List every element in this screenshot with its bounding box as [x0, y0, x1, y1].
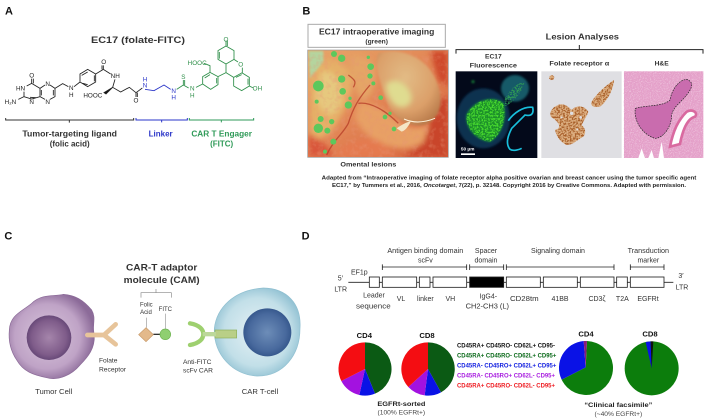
- construct labels: Spacer: [475, 248, 498, 255]
- atom labels: folic acid: O: [101, 59, 106, 66]
- structure: linker: H: [143, 76, 148, 83]
- legend: phenotypes: CD45RA+ CD45RO- CD62L+ CD95-: [457, 344, 555, 350]
- label: EC17 fluorescence: Fluorescence: [470, 62, 517, 69]
- photo: omental lesions: [308, 50, 448, 157]
- caption: omental lesions: Omental lesions: [340, 162, 397, 169]
- box: intraoperative imaging heading: (green): [365, 39, 388, 46]
- micrograph: H&E: [624, 71, 703, 158]
- label: CAR T-cell: CAR T-cell: [242, 387, 279, 396]
- panel: D construct and phenotype: [302, 231, 688, 418]
- construct labels: 3′: [678, 273, 684, 280]
- icon: tumor cell: [9, 294, 94, 379]
- construct labels: Antigen binding domain: [387, 248, 463, 255]
- legend: phenotypes: CD45RA+ CD45RO- CD62L- CD95+: [457, 383, 555, 389]
- caption: source attribution: EC17,” by Tummers et al., 2016, Oncotarget, 7(22), p. 32148. Copyright 2016 by Creative Commons. Adapted with permission.: [332, 183, 674, 189]
- panel: C CAR-T adaptor mechanism: [4, 231, 300, 396]
- pie chart: CD4 EGFRt-sorted: CD4: [357, 331, 373, 340]
- caption: clinical facsimile: “Clinical facsimile”: [584, 402, 652, 409]
- structure: FITC: S: [181, 74, 185, 81]
- labels: folic acid and FITC: Acid: [140, 310, 152, 316]
- construct labels: CD3ζ: [588, 296, 606, 303]
- label: linker: Linker: [149, 129, 173, 138]
- gene construct diagram: [348, 264, 673, 287]
- atom labels: folic acid: H: [69, 92, 74, 99]
- construct labels: LTR: [676, 284, 688, 291]
- structure: linker: [143, 76, 176, 101]
- construct labels: EF1p: [351, 270, 368, 277]
- construct labels: T2A: [616, 296, 629, 303]
- legend: phenotypes: CD45RA- CD45RO+ CD62L- CD95+: [457, 374, 555, 380]
- atom labels: folic acid: N: [45, 81, 50, 88]
- structure: FITC: N: [190, 86, 195, 93]
- panel: A chemical structure: [5, 6, 263, 149]
- construct labels: domain: [475, 258, 498, 265]
- panel letter D: D: [302, 231, 310, 243]
- label: folate receptor: Folate: [99, 357, 118, 364]
- micrograph: EC17 fluorescence: 50 μm: [461, 147, 474, 152]
- construct labels: EGFRt: [637, 296, 659, 303]
- label: tumor cell: Tumor Cell: [35, 387, 73, 396]
- structure: FITC: [177, 36, 263, 100]
- caption: EGFRt-sorted: (100% EGFRt+): [378, 409, 425, 416]
- structure: linker: H: [171, 94, 176, 101]
- pie chart: CD8 clinical facsimile: CD8: [642, 330, 658, 339]
- box: intraoperative imaging heading: [308, 24, 445, 47]
- bracket: CAM components: [141, 289, 171, 298]
- construct labels: Signaling domain: [531, 248, 585, 255]
- atom labels: folic acid: HOOC: [83, 92, 103, 99]
- structure: FITC: O: [238, 61, 243, 68]
- panel letter C: C: [4, 231, 12, 243]
- construct labels: IgG4-: [480, 293, 498, 300]
- construct labels: 41BB: [551, 296, 569, 303]
- atom labels: folic acid: [5, 59, 139, 106]
- construct labels: CD28tm: [510, 296, 539, 303]
- pie chart: CD8 EGFRt-sorted: CD8: [419, 331, 435, 340]
- construct labels: CH2-CH3 (L): [466, 304, 509, 311]
- construct labels: VL: [397, 296, 405, 303]
- legend: phenotypes: CD45RA- CD45RO+ CD62L+ CD95+: [457, 364, 557, 370]
- structure: FITC: HOOC: [188, 60, 207, 67]
- atom labels: folic acid: HN: [16, 86, 26, 93]
- label: folate receptor alpha: Folate receptor α: [549, 61, 610, 68]
- icon: anti-FITC CAR: [190, 323, 237, 345]
- atom labels: folic acid: O: [29, 72, 34, 79]
- panel letter B: B: [302, 6, 310, 18]
- label: folate receptor: Receptor: [99, 367, 127, 374]
- bracket: lesion analyses: [456, 45, 703, 54]
- structure: folic acid part: [18, 65, 142, 99]
- label: CAR T engager: (FITC): [210, 140, 234, 149]
- construct labels: Transduction: [628, 248, 669, 255]
- labels: folic acid and FITC: FITC: [159, 307, 173, 313]
- micrograph: folate receptor: [541, 71, 622, 158]
- structure: FITC: H: [190, 93, 195, 100]
- label: anti-FITC scFv CAR: Anti-FITC: [183, 359, 212, 366]
- legend: phenotypes: [457, 344, 557, 389]
- construct labels: VH: [445, 296, 455, 303]
- pie chart: CD8 EGFRt-sorted: [401, 331, 455, 396]
- structure: linker: N: [171, 88, 176, 95]
- atom labels: folic acid: O: [134, 98, 139, 105]
- structure: linker: N: [143, 83, 148, 90]
- caption: source attribution: Adapted from “Intraoperative imaging of folate receptor alpha positive ovarian and breast cancer using the tumor specific agent: [322, 175, 696, 181]
- heading: lesion analyses: Lesion Analyses: [546, 31, 619, 41]
- construct labels: sequence: [356, 304, 391, 311]
- atom labels: folic acid: H₂N: [5, 99, 17, 106]
- structure: FITC: OH: [253, 86, 263, 93]
- panel letter A: A: [5, 6, 13, 18]
- label: anti-FITC scFv CAR: scFv CAR: [183, 367, 213, 374]
- caption: clinical facsimile: (~40% EGFRt+): [594, 411, 642, 418]
- caption: EGFRt-sorted: EGFRt-sorted: [377, 401, 425, 408]
- heading: CAR-T adaptor molecule: molecule (CAM): [124, 275, 200, 285]
- bracket: CAR T engager: [189, 118, 254, 122]
- pie chart: CD4 EGFRt-sorted: [338, 331, 392, 396]
- bracket: linker: [136, 118, 187, 122]
- micrograph: EC17 fluorescence: [456, 71, 537, 158]
- heading: EC17: EC17 (folate-FITC): [91, 35, 185, 45]
- panel: B imaging: [302, 6, 703, 189]
- construct labels: Leader: [363, 292, 386, 299]
- pie chart: CD8 clinical facsimile: [625, 330, 679, 395]
- icon: adaptor molecule: [139, 314, 171, 342]
- atom labels: folic acid: NH: [111, 73, 120, 80]
- construct labels: LTR: [334, 286, 347, 293]
- atom labels: folic acid: N: [69, 85, 74, 92]
- pie chart: CD4 clinical facsimile: [559, 330, 613, 395]
- label: EC17 fluorescence: EC17: [485, 54, 502, 61]
- bracket: tumor-targeting ligand: [6, 118, 134, 123]
- structure: FITC: O: [224, 36, 229, 43]
- heading: CAR-T adaptor molecule: CAR-T adaptor: [126, 263, 198, 273]
- label: H&E: H&E: [655, 61, 669, 68]
- legend: phenotypes: CD45RA+ CD45RO- CD62L+ CD95+: [457, 354, 557, 360]
- construct labels: 5′: [338, 275, 344, 282]
- atom labels: folic acid: N: [29, 99, 34, 106]
- labels: folic acid and FITC: Folic: [140, 302, 153, 308]
- construct labels: marker: [637, 258, 660, 265]
- box: intraoperative imaging heading: EC17 intraoperative imaging: [319, 28, 434, 37]
- label: tumor-targeting ligand: Tumor-targeting ligand: [22, 129, 117, 138]
- pie chart: CD4 clinical facsimile: CD4: [578, 330, 594, 339]
- label: tumor-targeting ligand: (folic acid): [50, 140, 90, 149]
- label: CAR T engager: CAR T Engager: [191, 129, 252, 138]
- icon: CAR T cell: [214, 288, 300, 376]
- atom labels: folic acid: N: [45, 99, 50, 106]
- construct labels: linker: [417, 296, 434, 303]
- construct labels: scFv: [418, 258, 433, 265]
- construct labels: [334, 248, 688, 311]
- icon: folate receptor: [87, 324, 116, 344]
